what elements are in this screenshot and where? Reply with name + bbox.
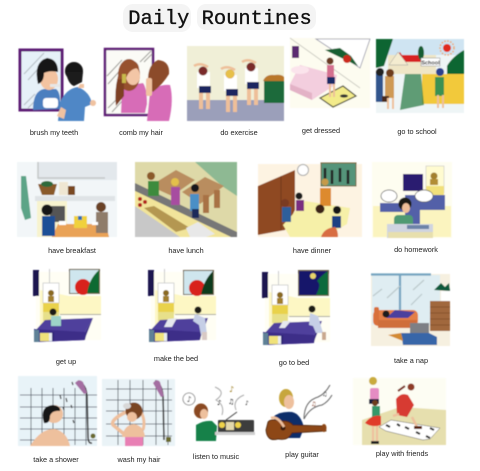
illustration: boy sitting up in bed: [33, 269, 101, 342]
illustration: family at dinner table: [258, 163, 362, 237]
illustration: kitchen breakfast: [17, 162, 117, 237]
label: do exercise: [220, 128, 258, 137]
illustration: canteen counter: [135, 162, 237, 237]
label: take a shower: [33, 455, 79, 464]
label: play with friends: [376, 449, 429, 458]
label: brush my teeth: [30, 128, 78, 137]
label: do homework: [394, 245, 438, 254]
label: get up: [56, 357, 76, 366]
panel: have dinner: [258, 163, 362, 255]
illustration: boy with radio: [183, 385, 255, 441]
panel: comb my hair: [105, 49, 172, 137]
label: wash my hair: [117, 455, 161, 464]
illustration: boy brushing teeth at mirror: [20, 50, 96, 121]
label: listen to music: [193, 452, 239, 461]
illustration: boy with guitar: ♫: [322, 391, 327, 398]
illustration: bedroom, girl dressing: [290, 38, 372, 108]
illustration: girl washing hair: [102, 379, 175, 446]
illustration: boy with radio: ♪: [229, 385, 234, 394]
panel: listen to music: [183, 385, 255, 461]
illustration: boy with guitar: ♫: [311, 401, 316, 408]
illustration: boy with radio: ♪: [217, 399, 221, 407]
illustration: girl combing hair at mirror: [105, 49, 172, 121]
illustration: boy doing homework: [372, 162, 452, 238]
panel: make the bed: [148, 269, 216, 363]
label: take a nap: [394, 356, 428, 365]
panel: have breakfast: [17, 162, 117, 255]
label: comb my hair: [119, 128, 163, 137]
panel: play with friends: [353, 377, 446, 458]
panel: have lunch: [135, 162, 237, 255]
title: Daily Rountines: [128, 8, 312, 31]
illustration: children playing hopscotch: [353, 377, 446, 445]
illustration: boy napping on sofa: [371, 274, 450, 346]
label: get dressed: [302, 126, 340, 135]
panel: take a shower: [18, 376, 97, 464]
panel: do exercise: [187, 46, 284, 137]
illustration: boy with radio: ♫: [228, 398, 234, 406]
illustration: boy with guitar: [266, 385, 332, 440]
panel: go to school: [376, 39, 464, 136]
panel: brush my teeth: [20, 50, 96, 137]
panel: take a nap: [371, 274, 450, 365]
panel: play guitar: [266, 385, 332, 459]
label: have breakfast: [48, 246, 96, 255]
label: play guitar: [285, 450, 319, 459]
panel: go to bed: [262, 270, 330, 367]
label: go to school: [397, 127, 437, 136]
panel: do homework: [372, 162, 452, 254]
illustration: boy making the bed: [148, 269, 216, 342]
panel: wash my hair: [102, 379, 175, 464]
illustration: children exercising: [187, 46, 284, 121]
panel: get up: [33, 269, 101, 366]
label: go to bed: [279, 358, 309, 367]
panel: get dressed: [290, 38, 372, 135]
label: have dinner: [293, 246, 332, 255]
illustration: boy going to bed at night: [262, 270, 330, 345]
illustration: boy with radio: ♪: [186, 395, 192, 404]
illustration: boy with radio: ♪: [245, 400, 249, 407]
label: have lunch: [168, 246, 204, 255]
label: make the bed: [154, 354, 198, 363]
illustration: boy in shower: [18, 376, 97, 446]
illustration: school building and pupils: School: [421, 60, 440, 66]
